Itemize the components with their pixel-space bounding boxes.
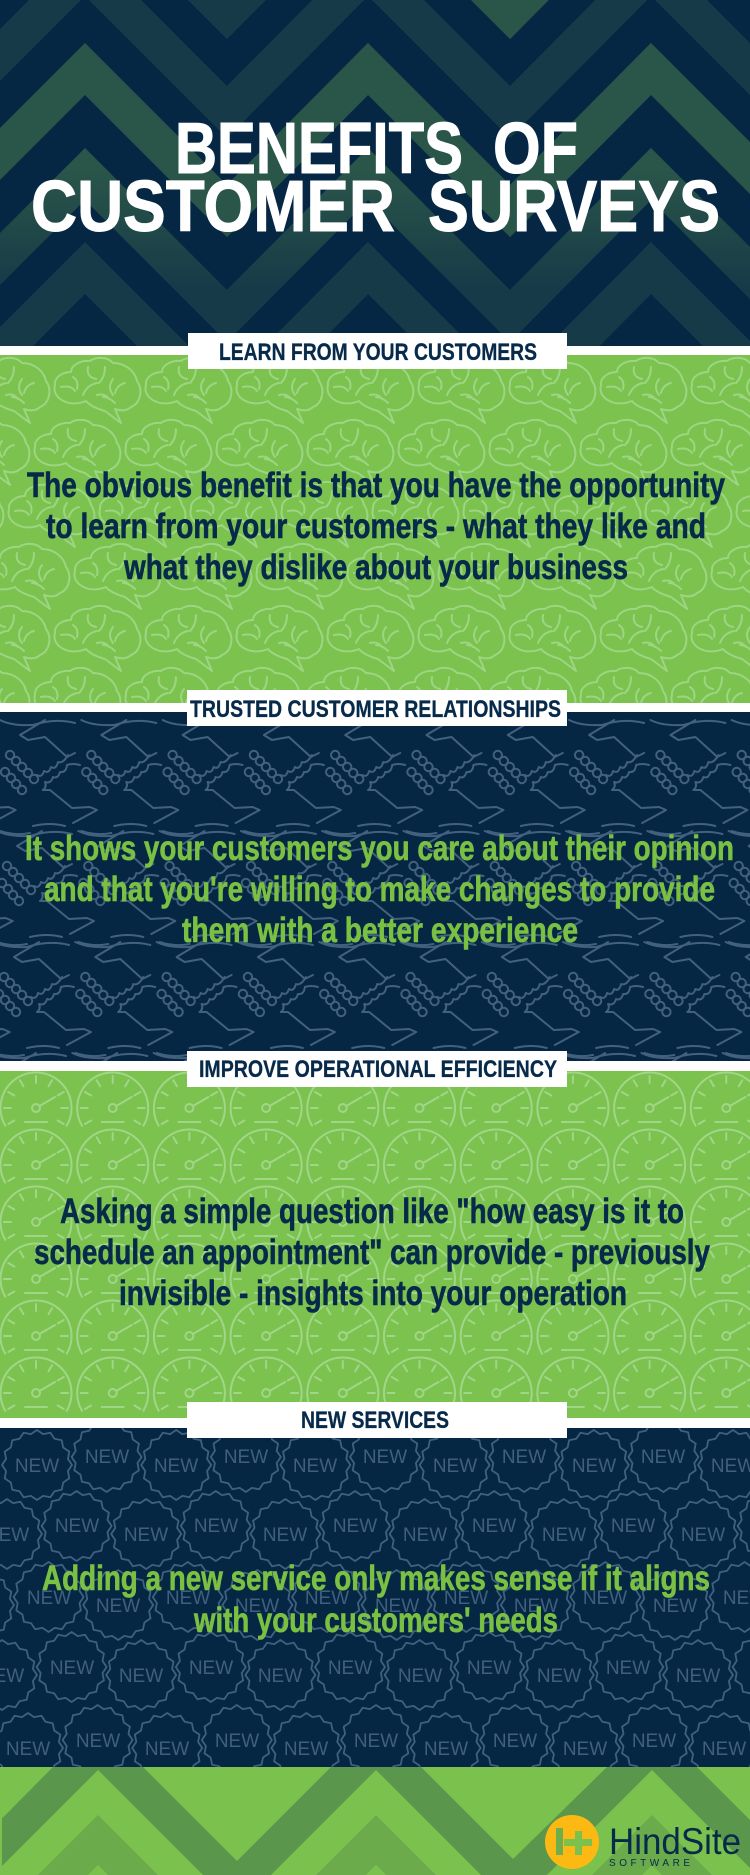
divider and label: new services: NEW SERVICES xyxy=(301,1407,449,1434)
panel: learn from your customers xyxy=(0,355,750,733)
body text xyxy=(34,1192,710,1313)
new badge pattern: NEW xyxy=(96,1596,140,1617)
body text xyxy=(42,1559,710,1640)
new badge pattern: NEW xyxy=(154,1456,198,1477)
new badge pattern: NEW xyxy=(284,1739,328,1760)
new badge pattern: NEW xyxy=(293,1456,337,1477)
new badge pattern: NEW xyxy=(433,1456,477,1477)
footer chevrons xyxy=(0,1767,750,1875)
new badge pattern: NEW xyxy=(354,1731,398,1752)
logo mark xyxy=(545,1815,599,1869)
divider and label: improve operational efficiency: IMPROVE OPERATIONAL EFFICIENCY xyxy=(199,1056,557,1083)
logo: HindSite Software xyxy=(545,1815,741,1869)
new badge pattern: NEW xyxy=(472,1516,516,1537)
new badge pattern: NEW xyxy=(235,1596,279,1617)
new badge pattern: NEW xyxy=(6,1739,50,1760)
new badge pattern: NEW xyxy=(572,1456,616,1477)
divider and label: trusted customer relationships xyxy=(0,690,750,726)
new badge pattern: NEW xyxy=(189,1658,233,1679)
new badge pattern: NEW xyxy=(632,1731,676,1752)
new badge pattern: NEW xyxy=(375,1596,419,1617)
new badge pattern xyxy=(0,1422,750,1783)
title: BENEFITS xyxy=(175,109,463,189)
new badge pattern: NEW xyxy=(702,1739,746,1760)
new badge pattern: NEW xyxy=(363,1447,407,1468)
new badge pattern: NEW xyxy=(467,1658,511,1679)
panel: header with chevrons xyxy=(0,0,750,346)
new badge pattern: NEW xyxy=(15,1456,59,1477)
new badge pattern: NEW xyxy=(215,1731,259,1752)
title: OF xyxy=(493,109,578,189)
new badge pattern: NEW xyxy=(124,1525,168,1546)
gauge icon pattern xyxy=(0,1072,750,1411)
divider and label: trusted customer relationships: TRUSTED CUSTOMER RELATIONSHIPS xyxy=(190,696,561,723)
logo tagline: SOFTWARE xyxy=(609,1858,690,1869)
new badge pattern: NEW xyxy=(166,1588,210,1609)
new badge pattern: NEW xyxy=(224,1447,268,1468)
new badge pattern: NEW xyxy=(403,1525,447,1546)
new badge pattern: NEW xyxy=(55,1516,99,1537)
new badge pattern: NEW xyxy=(328,1658,372,1679)
divider and label: improve operational efficiency xyxy=(0,1051,750,1087)
new badge pattern: NEW xyxy=(563,1739,607,1760)
divider and label: new services xyxy=(0,1402,750,1438)
panel: trusted customer relationships xyxy=(0,712,750,1061)
divider and label: learn from your customers xyxy=(0,333,750,369)
body text: with your customers' needs xyxy=(193,1601,558,1640)
new badge pattern: NEW xyxy=(641,1447,685,1468)
new badge pattern: NEW xyxy=(542,1525,586,1546)
title: CUSTOMER xyxy=(31,167,395,247)
body text: them with a better experience xyxy=(182,911,578,950)
new badge pattern: NEW xyxy=(258,1666,302,1687)
panel: improve operational efficiency xyxy=(0,1071,750,1418)
panel: new services xyxy=(0,1422,750,1783)
new badge pattern: NEW xyxy=(537,1666,581,1687)
handshake icon pattern xyxy=(0,720,750,1167)
new badge pattern: NEW xyxy=(681,1525,725,1546)
new badge pattern: NEW xyxy=(145,1739,189,1760)
new badge pattern: NEW xyxy=(85,1447,129,1468)
new badge pattern: NEW xyxy=(493,1731,537,1752)
title xyxy=(31,109,720,247)
new badge pattern: NEW xyxy=(514,1596,558,1617)
new badge pattern: NEW xyxy=(444,1588,488,1609)
divider and label: learn from your customers: LEARN FROM YOUR CUSTOMERS xyxy=(219,339,537,366)
new badge pattern: NEW xyxy=(76,1731,120,1752)
new badge pattern: NEW xyxy=(333,1516,377,1537)
chevron pattern xyxy=(0,0,750,346)
new badge pattern: NEW xyxy=(676,1666,720,1687)
body text xyxy=(27,466,725,587)
new badge pattern: NEW xyxy=(27,1588,71,1609)
new badge pattern: NEW xyxy=(263,1525,307,1546)
logo wordmark: HindSite xyxy=(609,1821,741,1862)
new badge pattern: NEW xyxy=(611,1516,655,1537)
new badge pattern: NEW xyxy=(606,1658,650,1679)
new badge pattern: NEW xyxy=(50,1658,94,1679)
new badge pattern: NEW xyxy=(502,1447,546,1468)
body text xyxy=(25,829,734,950)
new badge pattern: NEW xyxy=(194,1516,238,1537)
new badge pattern: NEW xyxy=(119,1666,163,1687)
new badge pattern: NEW xyxy=(583,1588,627,1609)
panel: footer xyxy=(0,1767,750,1875)
new badge pattern: NEW xyxy=(398,1666,442,1687)
new badge pattern: NEW xyxy=(424,1739,468,1760)
body text: what they dislike about your business xyxy=(123,548,628,587)
brain icon pattern xyxy=(0,358,750,733)
body text: invisible - insights into your operation xyxy=(119,1274,627,1313)
new badge pattern: NEW xyxy=(653,1596,697,1617)
new badge pattern: NEW xyxy=(305,1588,349,1609)
